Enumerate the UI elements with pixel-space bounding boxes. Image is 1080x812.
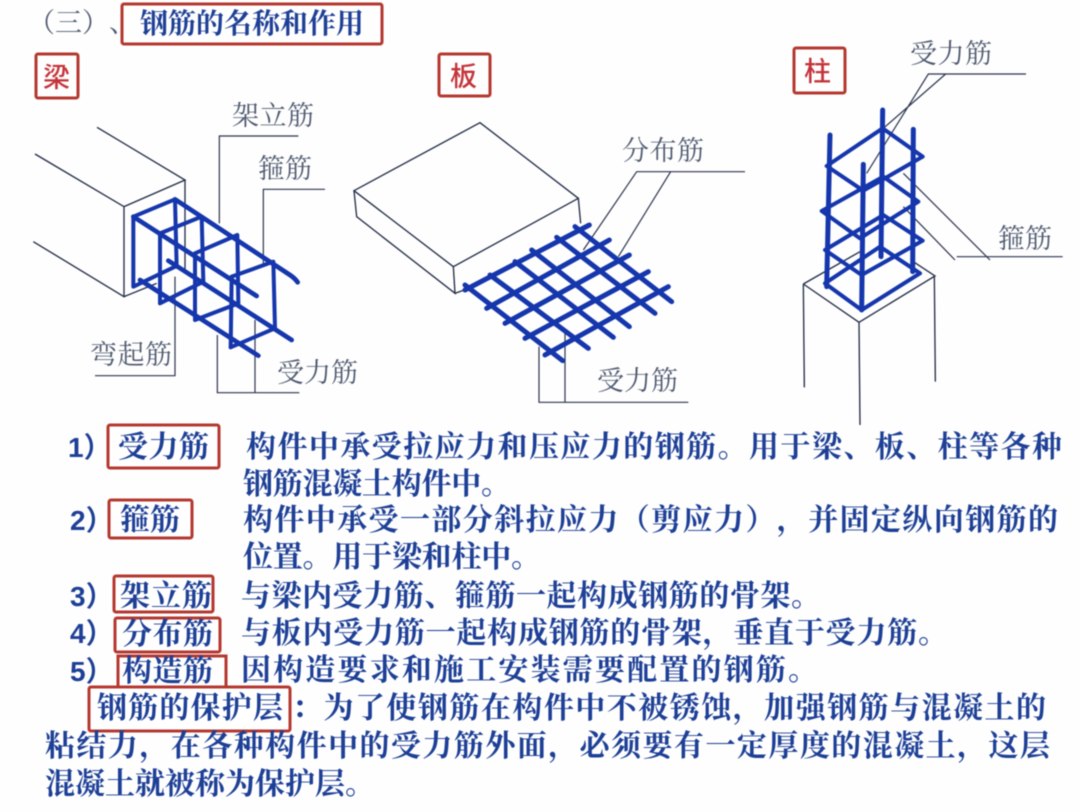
heading: slab: 板 (450, 62, 477, 92)
definition 3: erecting bar: 与梁内受力筋、箍筋一起构成钢筋的骨架。 (241, 579, 821, 613)
label: stirrup: 箍筋 (998, 224, 1052, 254)
definition 2: stirrup (70, 500, 1058, 574)
definition 3: erecting bar: 3） (70, 581, 114, 612)
definition: protective layer: 混凝土就被称为保护层。 (45, 768, 375, 801)
definition 2: stirrup: 构件中承受一部分斜拉应力（剪应力），并固定纵向钢筋的 (243, 504, 1058, 538)
panel: beam diagram (33, 54, 358, 393)
definition 3: erecting bar: 架立筋 (120, 580, 212, 613)
label: distribution bar: 分布筋 (622, 136, 704, 166)
heading: column: 柱 (804, 57, 831, 87)
definition 5: structural bar: 因构造要求和施工安装需要配置的钢筋。 (241, 654, 818, 687)
label: erecting bar: 架立筋 (232, 101, 314, 131)
definition 1: main bar (68, 425, 1062, 501)
definition 1: main bar: 1） (68, 432, 112, 463)
definition 3: erecting bar (70, 576, 821, 613)
definition 1: main bar: 受力筋 (118, 431, 209, 464)
definition: protective layer (45, 687, 1052, 801)
definition: protective layer: 钢筋的保护层 (97, 692, 285, 725)
definition: protective layer: ：为了使钢筋在构件中不被锈蚀，加强钢筋与混凝土的 (292, 692, 1046, 726)
panel: slab diagram (354, 54, 745, 402)
title: 钢筋的名称和作用 (140, 8, 364, 40)
definition 2: stirrup: 箍筋 (120, 504, 180, 537)
definition 2: stirrup: 位置。用于梁和柱中。 (243, 540, 541, 574)
panel: column diagram (794, 39, 1063, 425)
label: main bar: 受力筋 (910, 39, 992, 69)
definition 1: main bar: 构件中承受拉应力和压应力的钢筋。用于梁、板、柱等各种 (246, 430, 1062, 464)
definition 4: distribution bar: 分布筋 (122, 618, 213, 651)
beam drawing (33, 127, 325, 393)
label: bent bar: 弯起筋 (90, 340, 172, 370)
definition 4: distribution bar: 4） (70, 618, 114, 649)
label: main bar: 受力筋 (277, 358, 358, 388)
definition 2: stirrup: 2） (70, 505, 114, 536)
definition: protective layer: 粘结力，在各种构件中的受力筋外面，必须要有一定厚度的混凝土，这层 (45, 729, 1052, 764)
title (28, 4, 382, 44)
heading: column (794, 48, 845, 93)
slab drawing (354, 123, 745, 402)
heading: beam: 梁 (43, 63, 70, 93)
definition 5: structural bar: 5） (70, 656, 114, 687)
heading: beam (36, 54, 78, 98)
column drawing (803, 74, 1063, 425)
label: main bar: 受力筋 (597, 366, 678, 396)
definition 1: main bar: 钢筋混凝土构件中。 (243, 468, 511, 501)
heading: slab (439, 54, 490, 96)
label: stirrup: 箍筋 (258, 154, 312, 184)
definition 4: distribution bar: 与板内受力筋一起构成钢筋的骨架，垂直于受力筋。 (241, 617, 948, 651)
definition 5: structural bar: 构造筋 (122, 655, 213, 688)
title: （三）、 (28, 8, 136, 38)
